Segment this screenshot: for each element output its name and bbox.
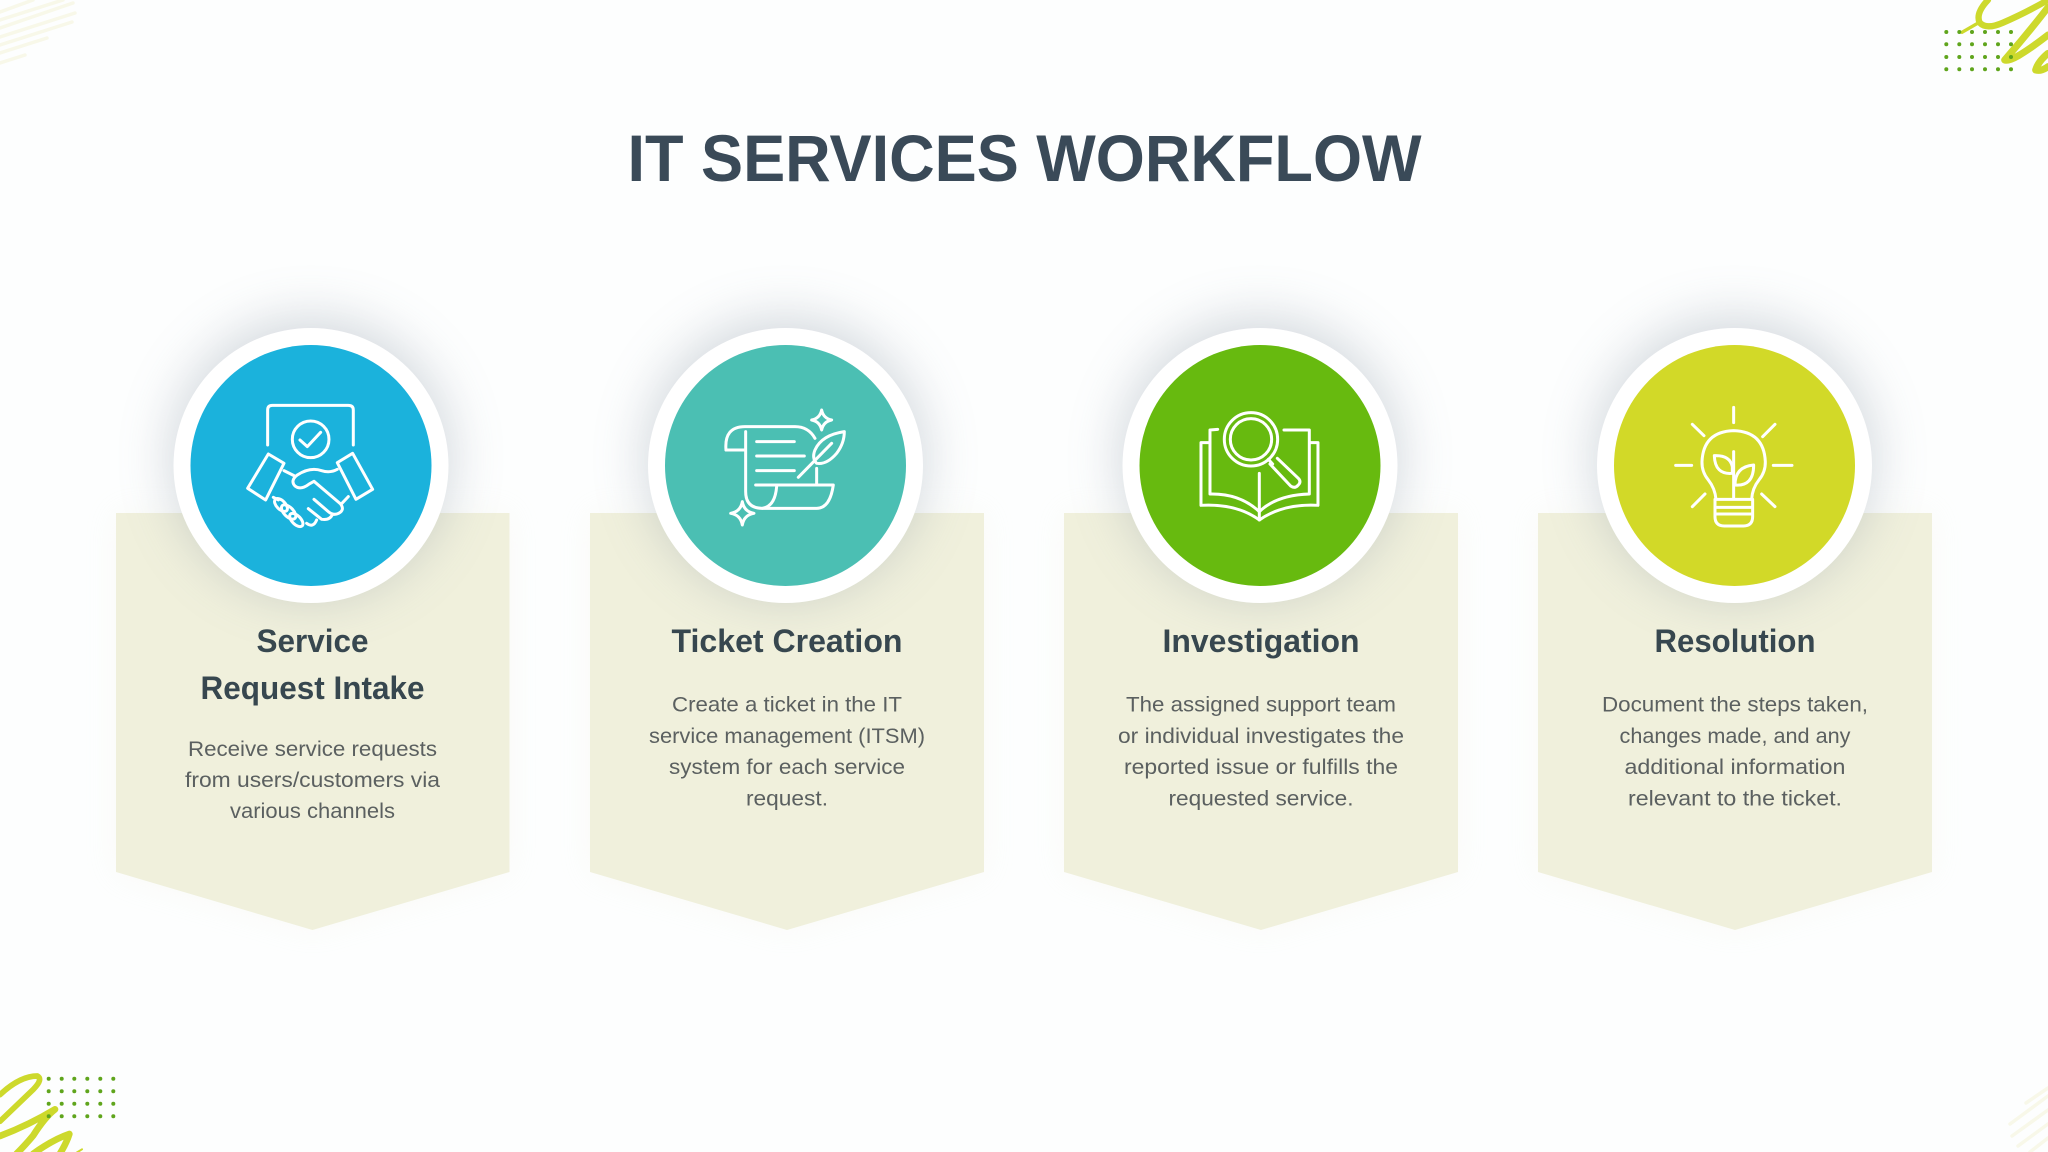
white circle ring: [1122, 328, 1398, 603]
icon: scroll with quill: [726, 410, 844, 525]
card background: [590, 513, 984, 930]
icon: handshake with check document: [248, 405, 373, 529]
heading: Ticket Creation: [672, 623, 902, 659]
title: IT SERVICES WORKFLOW: [628, 121, 1422, 195]
panel: ticket creation: [590, 318, 984, 930]
description: request.: [746, 786, 828, 810]
white circle ring: [174, 328, 448, 603]
description: system for each service: [669, 755, 905, 779]
icon: open book with magnifier: [1201, 413, 1318, 520]
description: reported issue or fulfills the: [1124, 755, 1398, 779]
white circle ring: [648, 328, 923, 603]
heading: Investigation: [1162, 623, 1360, 659]
green circle: [1140, 345, 1380, 586]
description: The assigned support team: [1126, 692, 1396, 716]
description: relevant to the ticket.: [1628, 786, 1842, 810]
decoration: top-right scribble and dots: [1944, 0, 2048, 71]
lime circle: [1614, 345, 1855, 586]
white circle ring: [1597, 328, 1872, 603]
description: or individual investigates the: [1118, 724, 1404, 748]
description: Document the steps taken,: [1602, 692, 1868, 716]
heading: Resolution: [1654, 623, 1816, 659]
description: [1602, 692, 1868, 810]
description: various channels: [230, 799, 395, 823]
description: service management (ITSM): [649, 724, 925, 748]
decoration: bottom-right pale streaks: [2010, 1088, 2048, 1152]
teal circle: [665, 345, 906, 586]
description: requested service.: [1168, 786, 1354, 810]
description: Create a ticket in the IT: [672, 692, 902, 716]
circle shadow: [171, 318, 451, 598]
description: [1118, 692, 1404, 810]
blue circle: [190, 345, 432, 586]
description: from users/customers via: [185, 768, 440, 792]
description: Receive service requests: [188, 737, 437, 761]
panel: investigation: [1064, 318, 1458, 930]
heading: Service: [256, 623, 368, 659]
icon: light bulb with plant: [1676, 407, 1792, 526]
decoration: bottom-left scribble and dots: [0, 1076, 115, 1152]
heading line 2: Request Intake: [200, 670, 424, 706]
panel: service request intake: [116, 318, 510, 930]
card background: [1064, 513, 1458, 930]
circle shadow: [1594, 318, 1874, 598]
description: [185, 737, 440, 823]
description: [649, 692, 925, 810]
decoration: top-left pale streaks: [0, 0, 75, 63]
circle shadow: [1120, 318, 1400, 598]
panel: resolution: [1538, 318, 1932, 930]
card background: [1538, 513, 1932, 930]
description: changes made, and any: [1620, 724, 1851, 748]
circle shadow: [646, 318, 926, 598]
card background: [116, 513, 510, 930]
description: additional information: [1624, 755, 1846, 779]
